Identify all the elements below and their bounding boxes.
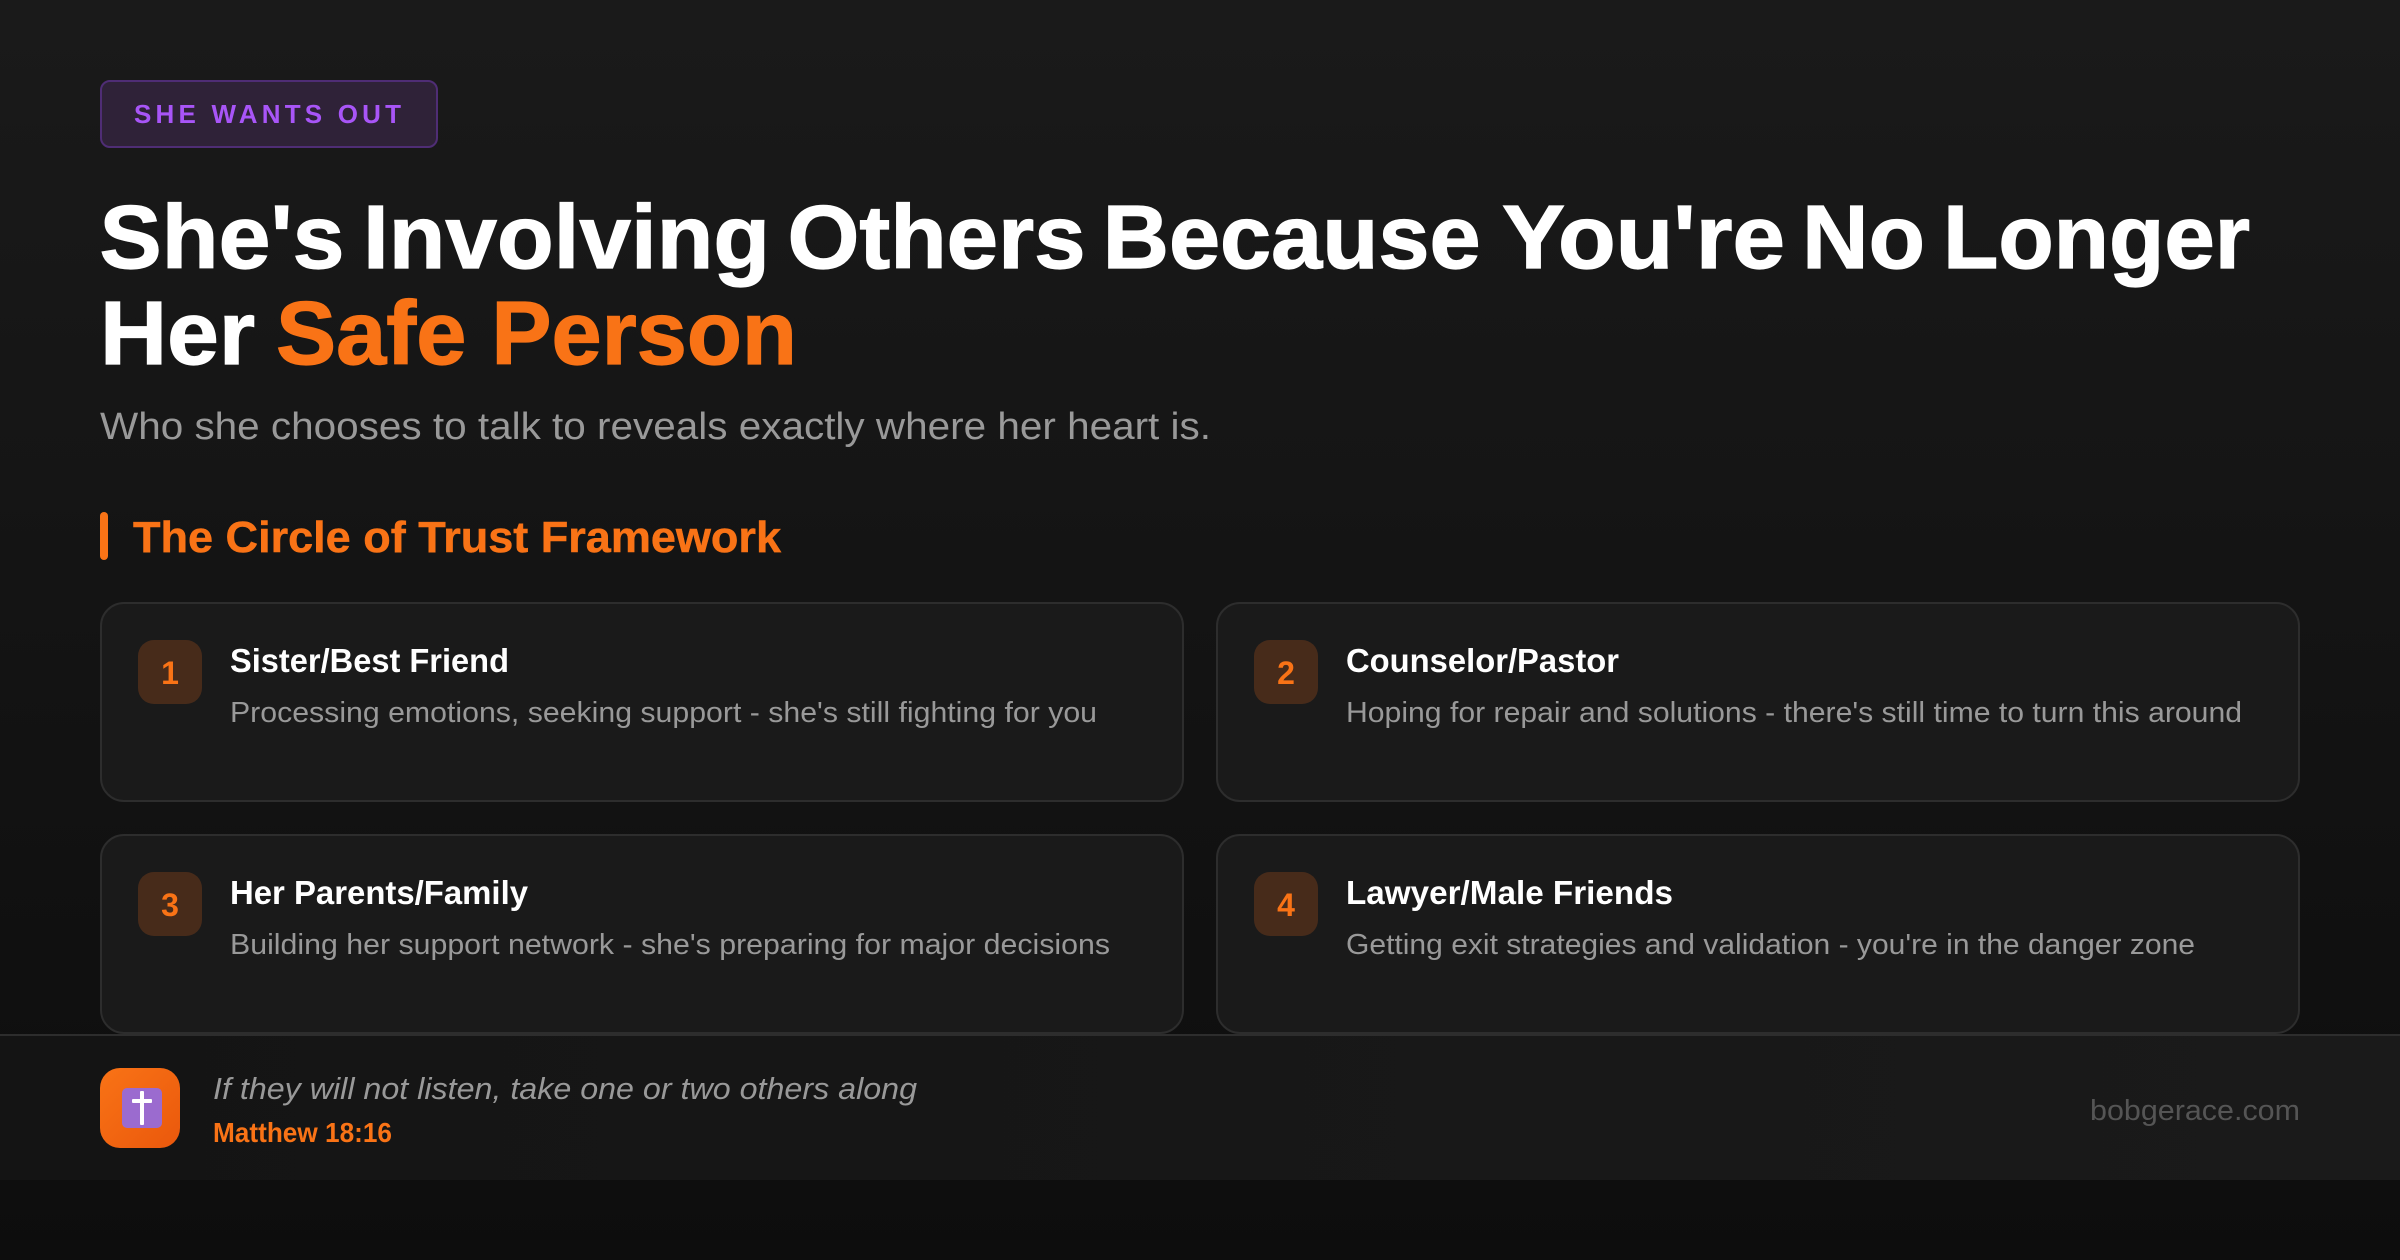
category badge [101, 81, 437, 147]
footer bar [0, 1034, 2400, 1180]
panel: card 1 Sister/Best Friend: Processing emotions, seeking support - she's still fighting for you [230, 697, 1097, 729]
panel: card 1 Sister/Best Friend: Sister/Best Friend [230, 642, 509, 679]
category badge: SHE WANTS OUT [134, 99, 401, 129]
title: Because [1103, 188, 1481, 288]
panel: card 3 Her Parents/Family: Building her support network - she's preparing for major decisions [230, 929, 1110, 961]
title: Others [788, 188, 1086, 288]
panel: card 3 Her Parents/Family: Her Parents/Family [230, 874, 529, 911]
title: Involving [363, 188, 770, 288]
title: She's [100, 188, 344, 288]
panel: card 2 Counselor/Pastor [1217, 603, 2299, 801]
panel: card 4 Lawyer/Male Friends: Lawyer/Male Friends [1346, 874, 1673, 911]
panel: card 2 Counselor/Pastor: Hoping for repair and solutions - there's still time to turn this around [1346, 697, 2242, 729]
title: Longer [1943, 188, 2250, 288]
title: No [1802, 188, 1925, 288]
scripture reference: Matthew 18:16 [213, 1117, 392, 1148]
icon: cross [100, 1068, 180, 1148]
title [100, 188, 2250, 384]
subtitle: Who she chooses to talk to reveals exactly where her heart is. [100, 406, 1211, 448]
title: You're [1502, 188, 1785, 288]
panel: card 3 Her Parents/Family [101, 835, 1183, 1033]
title: Safe Person [276, 284, 797, 384]
panel: card 1 Sister/Best Friend [101, 603, 1183, 801]
section heading: The Circle of Trust Framework: The Circle of Trust Framework [133, 513, 782, 562]
panel: card 3 Her Parents/Family: 3 [161, 887, 179, 923]
panel: card 2 Counselor/Pastor: 2 [1277, 655, 1295, 691]
scripture quote: If they will not listen, take one or two others along [213, 1071, 917, 1106]
panel: card 4 Lawyer/Male Friends: 4 [1277, 887, 1295, 923]
panel: card 4 Lawyer/Male Friends: Getting exit strategies and validation - you're in the danger zone [1346, 929, 2195, 961]
website: bobgerace.com [2090, 1095, 2300, 1127]
title: Her [100, 284, 255, 384]
panel: card 4 Lawyer/Male Friends [1217, 835, 2299, 1033]
panel: card 1 Sister/Best Friend: 1 [161, 655, 179, 691]
panel: card 2 Counselor/Pastor: Counselor/Pastor [1346, 642, 1619, 679]
